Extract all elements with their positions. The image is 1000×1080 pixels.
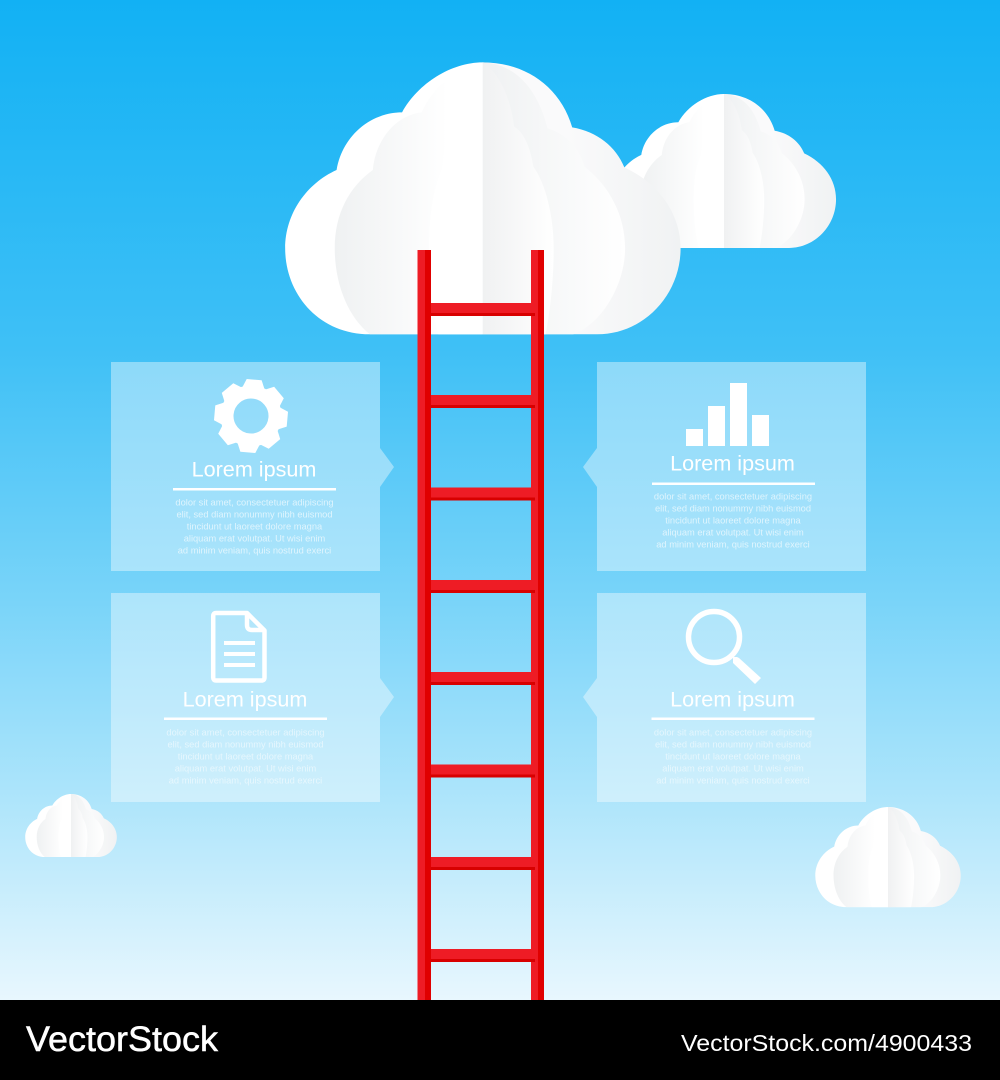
text block: ad minim veniam, quis nostrud exerci: [656, 776, 810, 786]
heading: Lorem ipsum: [670, 686, 795, 712]
icon: bar chart: [686, 383, 769, 446]
text block: elit, sed diam nonummy nibh euismod: [176, 510, 333, 520]
heading: Lorem ipsum: [192, 456, 316, 482]
text block: [175, 498, 334, 556]
text block: aliquam erat volutpat. Ut wisi enim: [184, 534, 326, 544]
text block: aliquam erat volutpat. Ut wisi enim: [662, 764, 804, 774]
panel: settings: [111, 362, 394, 571]
text block: ad minim veniam, quis nostrud exerci: [178, 546, 331, 556]
text block: dolor sit amet, consectetuer adipiscing: [166, 728, 325, 738]
panel: chart: [583, 362, 866, 571]
icon: document: [213, 613, 264, 680]
icon: magnifier: [688, 612, 761, 684]
text block: tincidunt ut laoreet dolore magna: [665, 516, 802, 526]
cloud: small lower left: [25, 794, 117, 857]
footer url text: VectorStock.com/4900433: [681, 1030, 972, 1056]
text block: ad minim veniam, quis nostrud exerci: [656, 540, 810, 550]
text block: tincidunt ut laoreet dolore magna: [665, 752, 802, 762]
text block: tincidunt ut laoreet dolore magna: [187, 522, 323, 532]
text block: dolor sit amet, consectetuer adipiscing: [654, 492, 812, 502]
footer bar: [0, 1000, 1000, 1080]
text block: elit, sed diam nonummy nibh euismod: [655, 740, 811, 750]
heading: Lorem ipsum: [183, 686, 307, 712]
cloud: large top: [285, 62, 681, 334]
cloud: lower right: [815, 807, 961, 907]
cloud: upper right: [612, 94, 836, 248]
heading: Lorem ipsum: [670, 450, 795, 476]
text block: tincidunt ut laoreet dolore magna: [178, 752, 314, 762]
icon: gear: [211, 376, 291, 456]
text block: [654, 492, 812, 550]
text block: ad minim veniam, quis nostrud exerci: [169, 776, 322, 786]
text block: elit, sed diam nonummy nibh euismod: [167, 740, 324, 750]
text block: [654, 728, 812, 786]
text block: [166, 728, 325, 786]
text block: aliquam erat volutpat. Ut wisi enim: [662, 528, 804, 538]
text block: dolor sit amet, consectetuer adipiscing: [654, 728, 812, 738]
footer logo text: VectorStock: [26, 1020, 219, 1059]
text block: dolor sit amet, consectetuer adipiscing: [175, 498, 334, 508]
text block: aliquam erat volutpat. Ut wisi enim: [175, 764, 317, 774]
text block: elit, sed diam nonummy nibh euismod: [655, 504, 811, 514]
red ladder: [418, 250, 544, 1000]
panel: search: [583, 593, 866, 802]
panel: document: [111, 593, 394, 802]
